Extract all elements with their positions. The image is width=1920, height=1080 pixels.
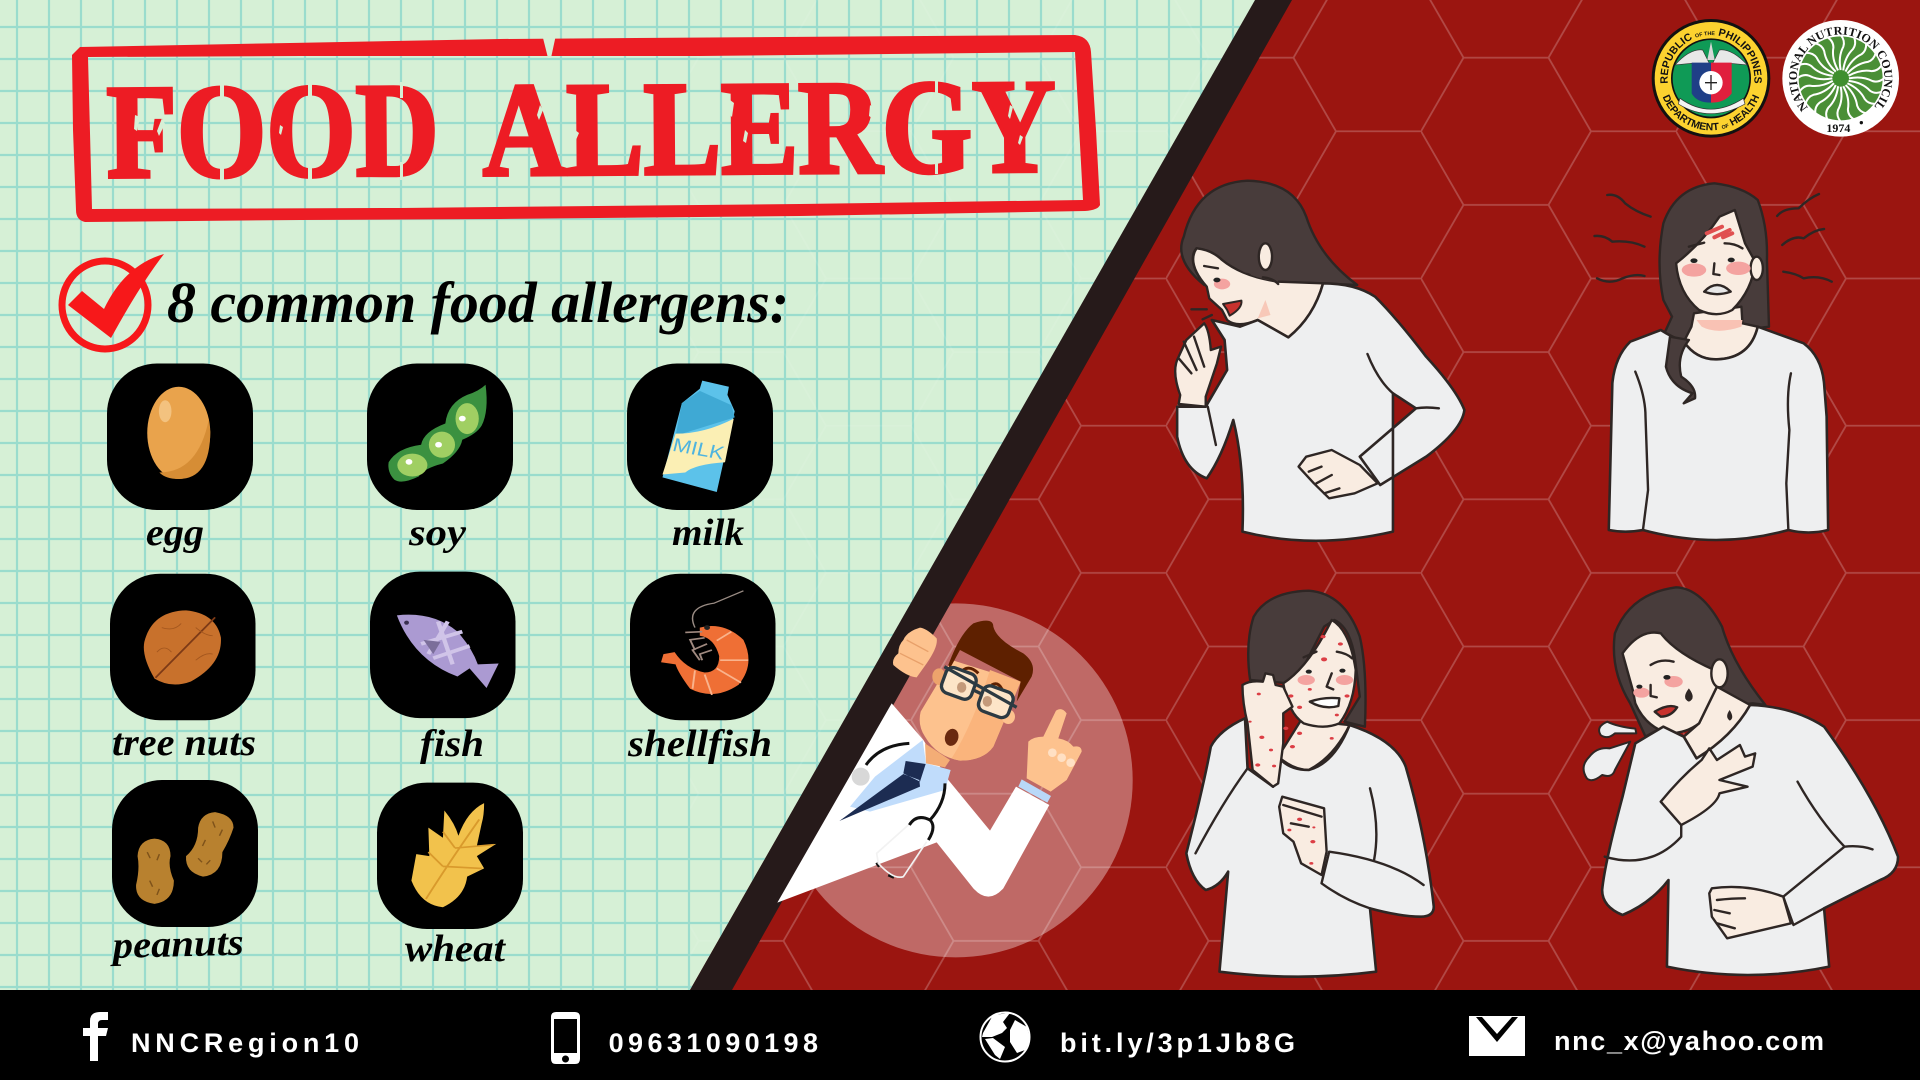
hand on chest xyxy=(1279,797,1327,875)
doctor eyebrows xyxy=(963,668,1004,695)
illustration: woman coughing xyxy=(1175,181,1464,541)
doctor ears xyxy=(932,668,946,685)
doctor neck xyxy=(925,743,950,767)
logo: Department of Health seal: REPUBLIC OF THE PHILIPPINES xyxy=(1660,28,1762,84)
face xyxy=(1676,210,1755,314)
hair xyxy=(1657,183,1769,403)
icon: facebook xyxy=(83,1012,108,1061)
allergen: shellfish xyxy=(627,574,776,765)
doctor hair xyxy=(948,621,1033,702)
illustration: doctor xyxy=(777,621,1082,903)
allergen: soy xyxy=(367,364,513,554)
hair xyxy=(1181,181,1357,285)
allergen: peanuts xyxy=(109,780,258,967)
allergen: soy: soy xyxy=(408,512,466,554)
doctor pointing hand xyxy=(1027,709,1082,792)
allergen: fish xyxy=(370,572,516,765)
mouth xyxy=(1310,698,1339,707)
stamp gap xyxy=(541,30,557,58)
panel: footer bar xyxy=(0,990,1920,1080)
icon: red check mark xyxy=(62,254,164,349)
sweater xyxy=(1177,283,1464,541)
sweater xyxy=(1186,718,1434,977)
hair xyxy=(1248,591,1366,727)
allergen: egg xyxy=(107,364,253,554)
illustration: woman with fever and flushed skin xyxy=(1594,183,1832,540)
logo: National Nutrition Council seal: 1974 xyxy=(1826,121,1850,135)
footer: facebook: NNCRegion10 xyxy=(131,1028,359,1058)
footer: email: nnc_x@yahoo.com xyxy=(1554,1026,1824,1056)
stencil slits and distress xyxy=(134,80,1023,180)
logo: National Nutrition Council seal: NATIONAL NUTRITION COUNCIL xyxy=(1789,26,1892,112)
allergen: peanuts: peanuts xyxy=(109,922,244,967)
allergen: milk: milk xyxy=(672,512,744,554)
mouth xyxy=(1704,285,1731,294)
allergen: tree nuts: tree nuts xyxy=(112,722,256,764)
footer: facebook xyxy=(83,1012,359,1061)
allergen: milk xyxy=(627,364,773,554)
sweater xyxy=(1609,327,1828,540)
footer: phone: 09631090198 xyxy=(609,1028,818,1058)
doctor tie xyxy=(839,761,926,821)
allergen: fish: fish xyxy=(420,723,484,765)
allergen: milk: MILK xyxy=(670,435,727,464)
doctor hand on edge xyxy=(893,628,937,677)
fist xyxy=(1299,450,1378,498)
footer: email xyxy=(1469,1016,1824,1056)
allergen: tree nuts xyxy=(110,574,256,764)
hand on cheek xyxy=(1242,673,1292,787)
flushed cheeks and forehead xyxy=(1682,263,1706,277)
panel: green graph paper background xyxy=(0,0,1260,990)
title word: ALLERGY: ALLERGY xyxy=(482,52,1056,204)
fever squiggles xyxy=(1594,194,1832,282)
subtitle: 8 common food allergens: xyxy=(167,270,789,335)
icon: envelope xyxy=(1469,1016,1525,1056)
doctor face xyxy=(920,660,1021,761)
allergen: wheat xyxy=(377,783,523,970)
raised hand xyxy=(1175,323,1221,407)
title word: FOOD: FOOD xyxy=(106,56,439,206)
illustration: woman with hives xyxy=(1186,591,1434,977)
footer: website: bit.ly/3p1Jb8G xyxy=(1060,1028,1295,1058)
icon: phone xyxy=(551,1012,580,1064)
hand on chest xyxy=(1661,745,1755,825)
doctor stethoscope xyxy=(866,743,945,877)
neck xyxy=(1684,687,1750,758)
neck xyxy=(1684,307,1758,359)
allergen: egg: egg xyxy=(146,512,204,554)
logo: Department of Health seal xyxy=(1652,19,1770,138)
hive spots xyxy=(1249,635,1350,865)
illustration: woman short of breath xyxy=(1584,587,1898,975)
hand on stomach xyxy=(1709,887,1791,938)
doctor mouth xyxy=(943,727,960,747)
diagonal dark band xyxy=(690,0,1292,990)
face and neck xyxy=(1278,720,1350,770)
sweater xyxy=(1602,705,1898,975)
doctor shirt collar xyxy=(850,740,951,812)
allergen: wheat: wheat xyxy=(405,928,507,970)
icon: globe xyxy=(980,1012,1030,1062)
doctor glasses xyxy=(939,665,1017,720)
face xyxy=(1623,632,1717,733)
allergen: shellfish: shellfish xyxy=(627,723,772,765)
hair xyxy=(1614,587,1765,737)
footer: phone xyxy=(551,1012,818,1064)
allergen grid xyxy=(107,364,776,970)
title stamp: FOOD ALLERGY xyxy=(72,30,1100,222)
doctor sleeve cuff xyxy=(1018,779,1051,803)
footer: website xyxy=(980,1012,1295,1062)
doctor spotlight circle xyxy=(779,603,1133,957)
breath puffs xyxy=(1584,722,1636,780)
logo: Department of Health seal: DEPARTMENT OF HEALTH xyxy=(1662,94,1760,130)
doctor coat xyxy=(777,703,1049,903)
stamp frame xyxy=(72,35,1100,222)
face and neck xyxy=(1193,248,1323,337)
